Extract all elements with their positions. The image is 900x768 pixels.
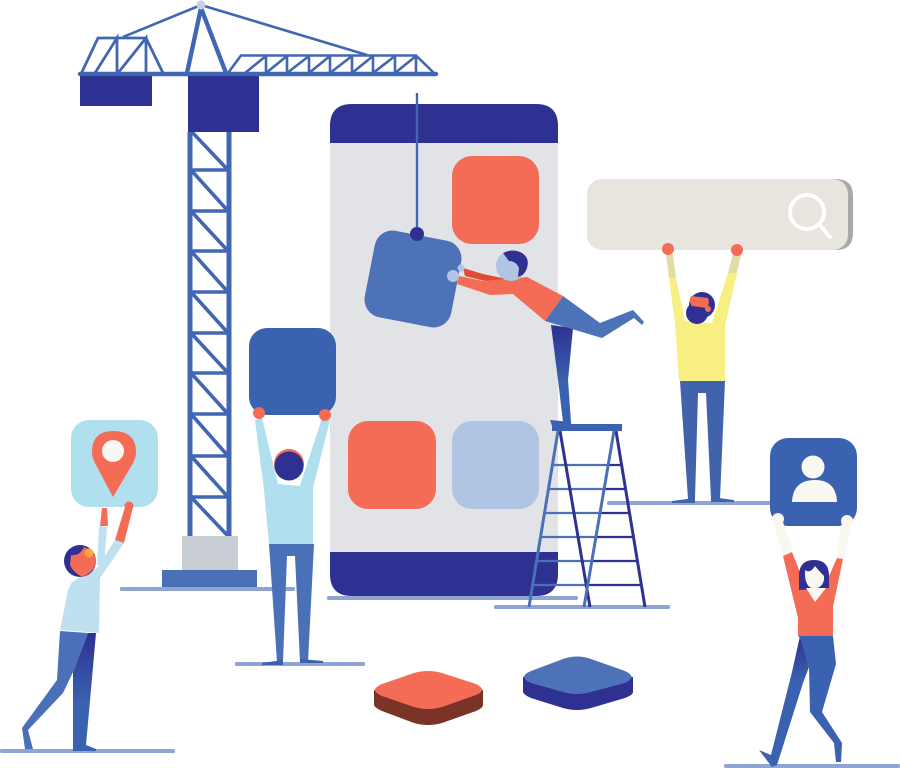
left forearm bbox=[100, 508, 108, 526]
arms bbox=[772, 519, 793, 556]
forearms bbox=[666, 254, 676, 278]
icon: user bbox=[792, 456, 837, 502]
ladder bbox=[529, 424, 645, 607]
far arm bbox=[463, 268, 507, 284]
torso and sleeve bbox=[60, 540, 124, 633]
light leg bbox=[22, 631, 88, 749]
raised leg bbox=[545, 296, 644, 338]
crane bbox=[80, 0, 436, 588]
smartphone bbox=[330, 104, 558, 596]
head bbox=[689, 292, 715, 318]
hands bbox=[447, 270, 459, 282]
crane base bbox=[162, 536, 257, 588]
icon: map pin bbox=[92, 431, 136, 497]
crane hook bbox=[410, 227, 424, 241]
ground line: user person bbox=[724, 764, 900, 768]
hanging app tile bbox=[361, 227, 465, 331]
ground line: tile person bbox=[235, 662, 365, 666]
head bbox=[64, 545, 96, 577]
face bbox=[805, 566, 824, 589]
app tile: top red bbox=[452, 156, 539, 244]
shirt bbox=[255, 418, 330, 544]
search bar bbox=[587, 179, 853, 250]
person: reaching on ladder bbox=[447, 250, 644, 426]
person: holding blue tile bbox=[253, 407, 331, 665]
pants bbox=[680, 381, 725, 499]
hair bbox=[799, 560, 829, 590]
hands bbox=[253, 407, 265, 419]
hands bbox=[662, 243, 674, 255]
phone top bar bbox=[330, 104, 558, 143]
crane hook cable bbox=[416, 93, 418, 232]
person: holding user tile bbox=[759, 513, 853, 767]
crane mast bbox=[190, 131, 229, 537]
person: holding search bar bbox=[662, 243, 743, 503]
hand bbox=[124, 502, 134, 510]
neck bbox=[806, 588, 826, 602]
3D tile: red bbox=[374, 671, 483, 725]
crane jib bbox=[80, 5, 436, 74]
icon: magnifier bbox=[790, 195, 830, 237]
ear bbox=[84, 548, 94, 558]
shirt bbox=[669, 273, 737, 381]
head bbox=[496, 251, 526, 281]
phone bottom bar bbox=[330, 552, 558, 596]
right forearm bbox=[115, 507, 133, 543]
ground line: search person bbox=[607, 501, 772, 505]
hands bbox=[772, 513, 784, 525]
front leg bbox=[798, 636, 842, 762]
person: holding location tile bbox=[22, 502, 134, 751]
3D tile: blue bbox=[523, 656, 633, 710]
standing leg bbox=[551, 325, 573, 422]
dark leg bbox=[73, 633, 96, 751]
back leg bbox=[759, 636, 809, 767]
ground line: phone bbox=[327, 596, 578, 600]
app tile: bottom red bbox=[348, 421, 436, 509]
pants bbox=[269, 544, 314, 662]
ground line: pin person bbox=[0, 749, 175, 753]
app tile: held blue bbox=[249, 328, 336, 415]
left sleeve bbox=[97, 526, 107, 565]
ground line: crane bbox=[120, 587, 295, 591]
app tile: light blue bbox=[452, 421, 539, 509]
app tile: user profile bbox=[770, 438, 857, 526]
crane top pulley bbox=[196, 0, 206, 10]
ground line: ladder bbox=[494, 605, 670, 609]
shirt bbox=[783, 552, 843, 636]
crane counterweights bbox=[80, 76, 259, 132]
head bbox=[274, 449, 304, 479]
shirt bbox=[457, 276, 563, 321]
app tile: location bbox=[71, 420, 158, 507]
